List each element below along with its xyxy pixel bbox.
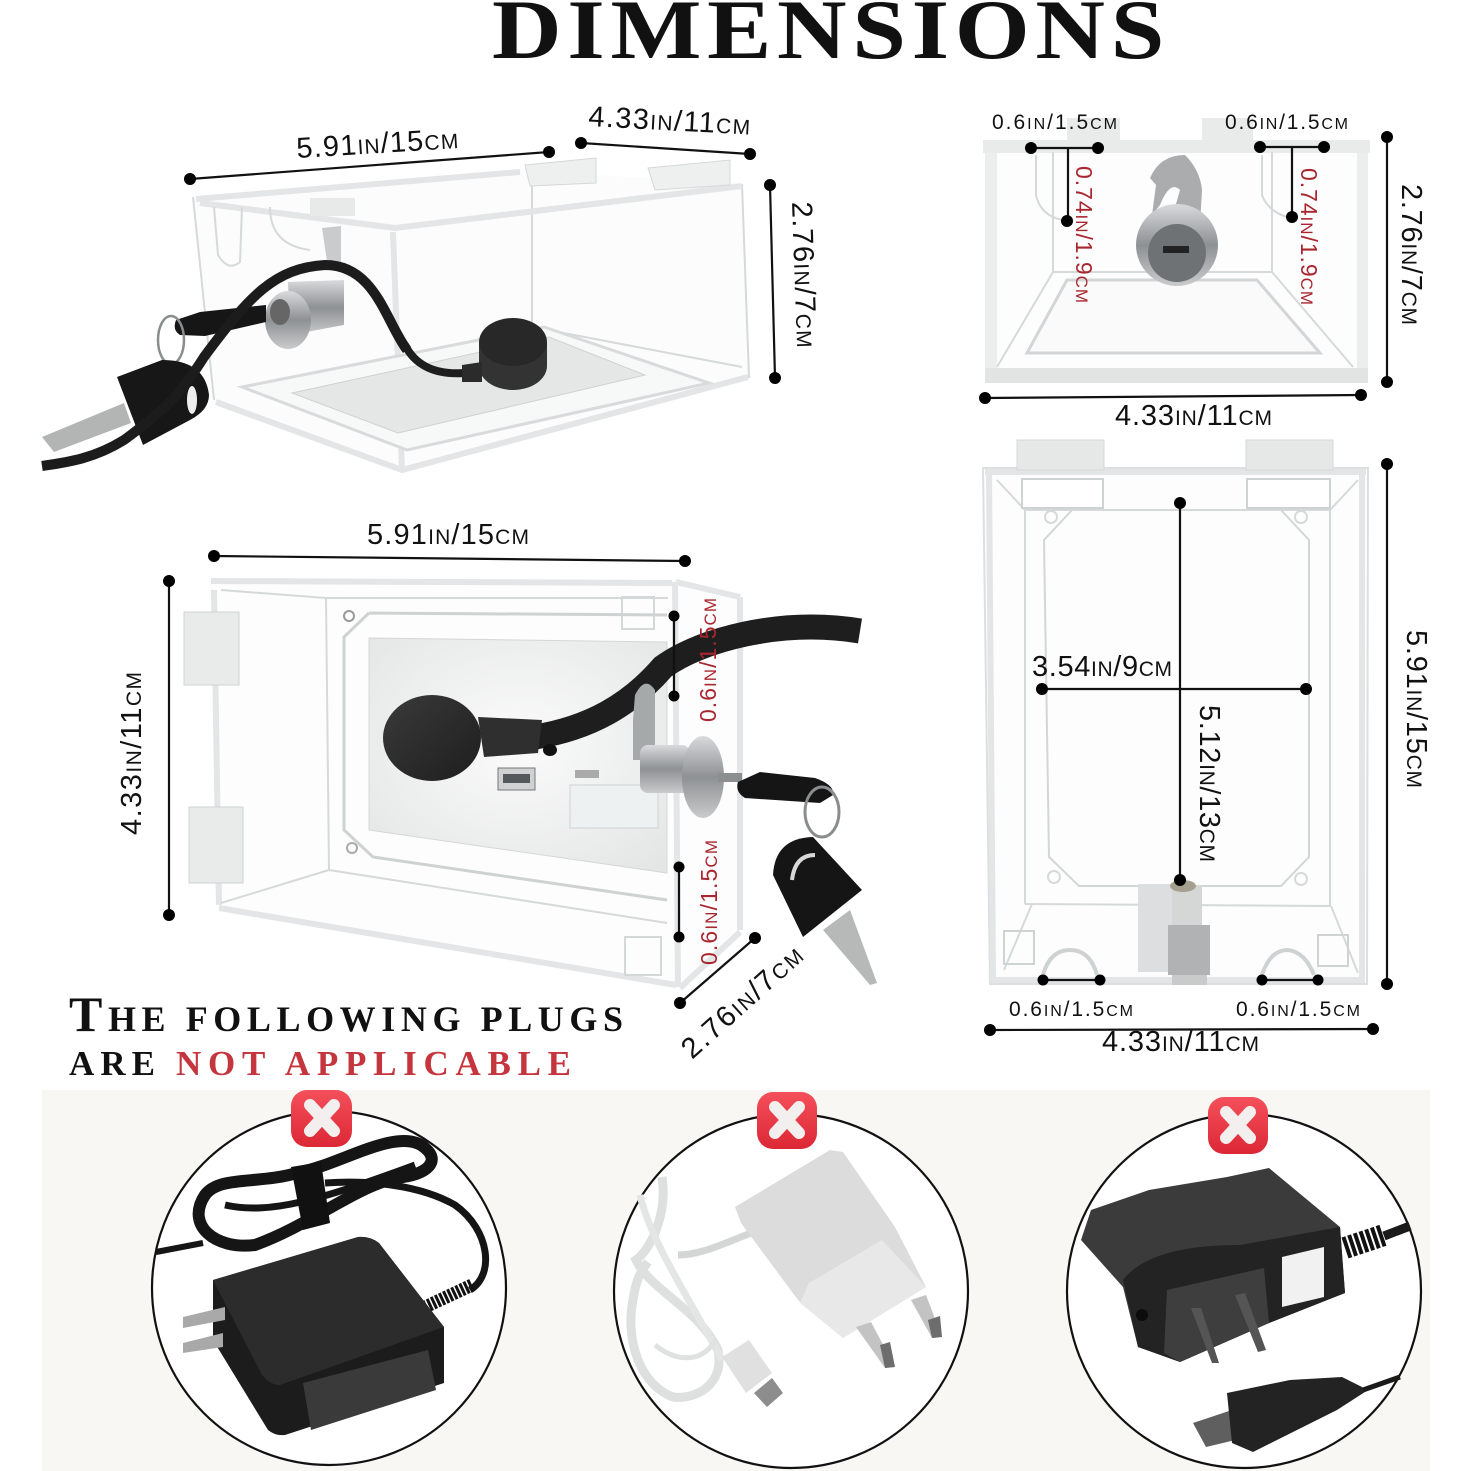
icon: red cross 2 [757,1092,817,1149]
dimension: notch lower: 0.6IN/1.5CM [696,840,722,965]
dimension: width [984,1023,1379,1058]
lock cam and cylinder [1136,155,1218,286]
dimension: notch upper: 0.6IN/1.5CM [695,598,721,722]
dimension: notch right [1225,111,1348,223]
dimension: depth: 4.33IN/11CM [588,101,751,141]
power cord front [42,265,407,466]
plug circle 3: black wall adapter [1067,1114,1421,1468]
dimension: notch lower [674,840,722,965]
dimension: height [116,575,175,921]
box outline [983,440,1368,984]
dimension: height: 2.76 IN /7 CM [785,201,822,348]
dimension: plate width [1032,651,1312,695]
panel: back view with mounting plate [983,440,1432,1058]
heading: plugs not applicable: ARE [69,1044,155,1083]
dimension: notch left: 0.6IN/1.5CM [992,111,1117,134]
panel: unsupported plugs band [42,1090,1430,1471]
dimension: notch right [1236,974,1360,1021]
red label left: 0.74 IN /1.9 CM [1071,166,1097,303]
dimension: width [979,389,1367,432]
dimension: plate height [1174,497,1225,886]
dimension: plate height: 5.12 IN /13 CM [1193,705,1225,862]
dimension: notch right: 0.6IN/1.5CM [1225,111,1348,134]
dimension: height [1381,131,1427,388]
dimension: notch right: 0.6IN/1.5CM [1236,998,1360,1021]
dimension: width [184,123,555,185]
dimension: total height: 5.91 IN /15 CM [1400,630,1432,788]
dimension: width [208,519,691,567]
icon: red cross 3 [1208,1097,1268,1154]
dimension: height: 2.76 IN /7 CM [1395,184,1427,325]
panel: top view with outlet [116,519,877,1065]
box outline [184,578,742,990]
dimension: depth: 2.76IN/7CM [675,940,810,1065]
dimension: notch upper [668,598,721,722]
dimension: depth [575,101,756,160]
dimension: total height [1381,458,1432,990]
box outline [983,118,1370,383]
plug circle 2: white wall charger [614,1114,968,1468]
dimension: notch left [992,111,1117,227]
key on ring [737,772,877,985]
heading: plugs not applicable: NOT APPLICABLE [176,1044,571,1083]
dimension: plate width: 3.54IN/9CM [1032,651,1172,683]
plug circle 1: square laptop adapter [152,1111,506,1465]
dimension: notch left [1009,974,1133,1021]
icon: red cross 1 [291,1090,352,1147]
red label right: 0.74 IN /1.9 CM [1296,168,1322,305]
lock cylinder [265,280,344,349]
power plug and cord inside [405,318,547,390]
dimension: width: 4.33IN/11CM [1115,400,1272,432]
outlet plate [369,638,667,873]
heading: plugs not applicable: THE FOLLOWING PLUGS [69,986,623,1042]
panel: front view of box top right [979,111,1427,432]
dimension: width: 4.33IN/11CM [1102,1026,1259,1058]
key [42,305,266,452]
lock and cam [633,684,742,818]
dimension: width: 5.91IN/15CM [295,123,459,165]
power cord and plug [383,627,860,781]
dimension: width: 5.91IN/15CM [367,519,529,551]
dimension: height: 4.33IN/11CM [116,672,148,835]
lock seen through base [1138,880,1210,985]
dimension: height [764,179,822,384]
box outline [193,158,749,473]
dimension: notch left: 0.6IN/1.5CM [1009,998,1133,1021]
panel: perspective view of box [42,101,822,473]
heading: plugs not applicable [69,986,623,1083]
